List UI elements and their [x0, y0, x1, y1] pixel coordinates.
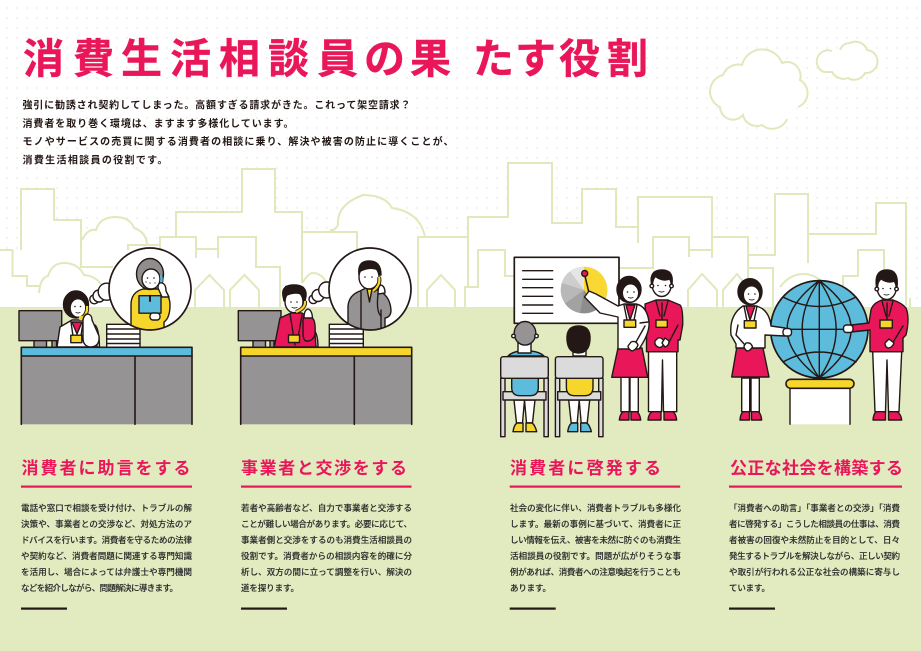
document stack — [107, 324, 140, 347]
body text: 「消費者への助言」「事業者との交渉」「消費 — [729, 503, 900, 513]
heading: 事業者と交渉をする — [241, 459, 407, 478]
column 2: negotiating with businesses — [241, 459, 412, 610]
icon: monitor — [238, 311, 281, 348]
intro text: モノやサービスの売買に関する消費者の相談に乗り、解決や被害の防止に導くことが、 — [22, 135, 454, 148]
desk — [21, 347, 192, 424]
body text: します。最新の事例に基づいて、消費者に正 — [510, 519, 681, 529]
background: clouds in sky — [710, 42, 878, 129]
body text — [21, 503, 192, 593]
audience member: yellow shirt — [555, 326, 603, 437]
body text: ています。 — [729, 583, 770, 593]
body text: しい情報を伝え、被害を未然に防ぐのも消費生 — [510, 535, 681, 545]
body text: ドバイスを行います。消費者を守るための法律 — [21, 535, 192, 545]
man with badge — [844, 270, 908, 420]
heading: 公正な社会を構築する — [730, 458, 903, 478]
body text: や契約など、消費者問題に関連する専門知識 — [21, 551, 192, 561]
intro text — [22, 98, 454, 166]
illustration: fair society with globe — [731, 270, 908, 424]
audience member: blue shirt — [501, 322, 548, 437]
body text: などを紹介しながら、問題解決に導きます。 — [21, 583, 178, 593]
body text: 決策や、事業者との交渉など、対処方法のア — [21, 519, 192, 529]
body text — [241, 503, 412, 593]
body text: 役割です。消費者からの相談内容を的確に分 — [241, 551, 412, 561]
intro text: 強引に勧誘され契約してしまった。高額すぎる請求がきた。これって架空請求？ — [22, 98, 410, 112]
background: city skyline — [0, 163, 910, 307]
globe on pedestal — [771, 281, 868, 424]
presentation board with pie chart — [514, 257, 619, 323]
heading: 消費者に助言をする — [22, 459, 190, 478]
body text: や取引が行われる公正な社会の構築に寄与し — [729, 567, 900, 577]
body text: ことが難しい場合があります。必要に応じて、 — [241, 519, 412, 529]
presenter man — [645, 270, 683, 420]
caller bubble: consumer with parcel — [109, 248, 191, 335]
body text: あります。 — [510, 583, 551, 593]
column 1: advising consumers — [21, 459, 192, 610]
document stack — [329, 324, 363, 347]
body text: 例があれば、消費者への注意喚起を行うことも — [510, 567, 681, 577]
illustration: advising consumer at desk — [19, 248, 192, 424]
body text: を活用し、場合によっては弁護士や専門機関 — [21, 567, 192, 577]
body text — [729, 503, 900, 593]
intro text: 消費者を取り巻く環境は、ますます多様化しています。 — [22, 117, 294, 130]
heading: 消費者に啓発する — [510, 459, 661, 478]
column 3: educating consumers — [510, 459, 681, 610]
body text: 社会の変化に伴い、消費者トラブルも多様化 — [510, 503, 681, 513]
body text: 電話や窓口で相談を受け付け、トラブルの解 — [21, 503, 192, 513]
body text — [510, 503, 681, 593]
presenter woman with pointer — [582, 270, 649, 420]
illustration: seminar presentation — [501, 257, 683, 437]
staff member on phone — [57, 291, 100, 347]
title: 消費生活相談員の果たす役割 — [23, 36, 648, 82]
background: green ground — [0, 307, 921, 651]
body text: 析し、双方の間に立って調整を行い、解決の — [241, 567, 412, 577]
body text: 若者や高齢者など、自力で事業者と交渉する — [241, 503, 412, 513]
illustration: negotiating with business — [238, 248, 412, 424]
body text: 事業者側と交渉をするのも消費生活相談員の — [241, 535, 412, 545]
body text: 活相談員の役割です。問題が広がりそうな事 — [510, 551, 681, 561]
thought bubbles — [90, 283, 115, 304]
intro text: 消費生活相談員の役割です。 — [22, 154, 168, 166]
caller bubble: business person — [329, 248, 411, 335]
body text: 者に啓発する」こうした相談員の仕事は、消費 — [729, 519, 900, 529]
woman with badge — [731, 279, 792, 420]
icon: monitor — [19, 311, 62, 348]
column 4: building a fair society — [729, 458, 903, 610]
body text: 発生するトラブルを解決しながら、正しい契約 — [729, 551, 900, 561]
thought bubbles — [309, 282, 335, 304]
body text: 者被害の回復や未然防止を目的として、日々 — [729, 535, 900, 545]
staff member on phone — [274, 285, 318, 347]
desk — [241, 347, 412, 424]
body text: 道を探ります。 — [241, 583, 299, 593]
